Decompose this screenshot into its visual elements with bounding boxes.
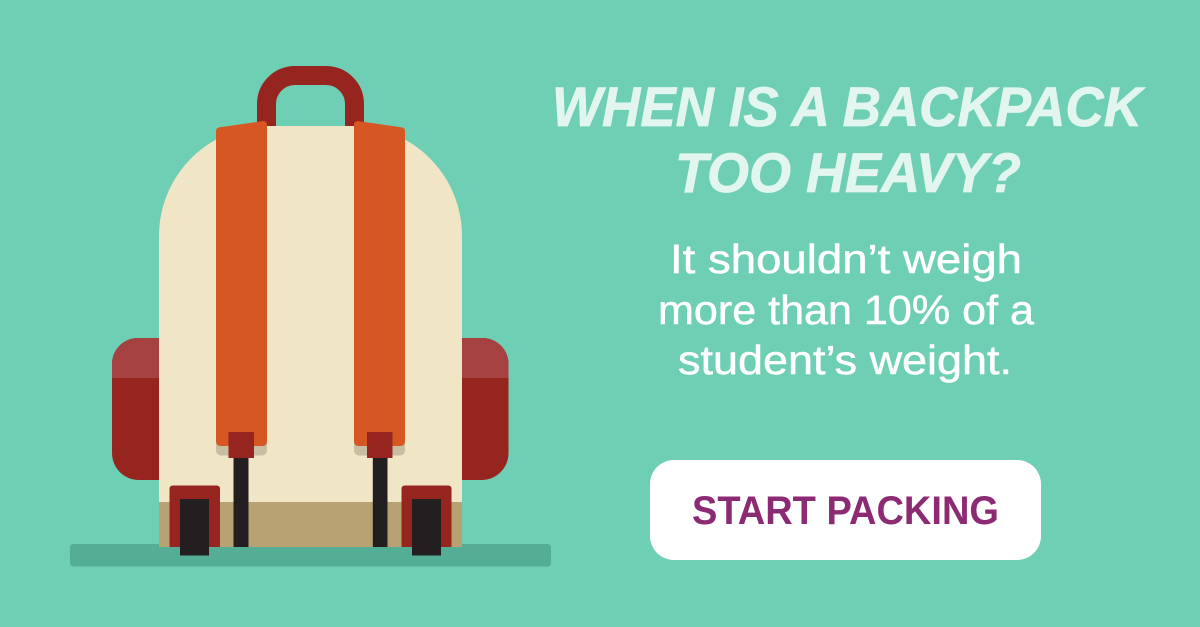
left buckle <box>228 432 254 458</box>
backpack body <box>159 126 462 547</box>
title: TOO HEAVY? <box>675 141 1021 204</box>
left shoulder strap <box>216 121 267 446</box>
right front pocket <box>402 486 452 547</box>
left front pocket <box>170 486 220 547</box>
ground shadow <box>70 544 551 566</box>
right buckle <box>367 432 392 458</box>
right strap shadow <box>354 420 405 456</box>
title: WHEN IS A BACKPACK <box>552 75 1145 138</box>
right front wheel block <box>412 499 441 556</box>
left lower strap <box>234 457 248 547</box>
title <box>552 75 1145 204</box>
body text: student’s weight. <box>678 337 1012 383</box>
left side pocket <box>112 338 160 480</box>
icon: backpack <box>112 76 508 556</box>
backpack handle <box>266 76 354 128</box>
button: start packing <box>650 460 1041 560</box>
body text <box>658 236 1034 383</box>
button: start packing: START PACKING <box>692 489 999 533</box>
body text: more than 10% of a <box>658 287 1034 333</box>
right side pocket <box>461 338 508 480</box>
right shoulder strap <box>354 121 405 446</box>
right lower strap <box>373 457 388 547</box>
left front wheel block <box>180 499 209 556</box>
body text: It shouldn’t weigh <box>670 236 1022 282</box>
left strap shadow <box>216 420 267 456</box>
backpack base panel <box>159 502 462 547</box>
